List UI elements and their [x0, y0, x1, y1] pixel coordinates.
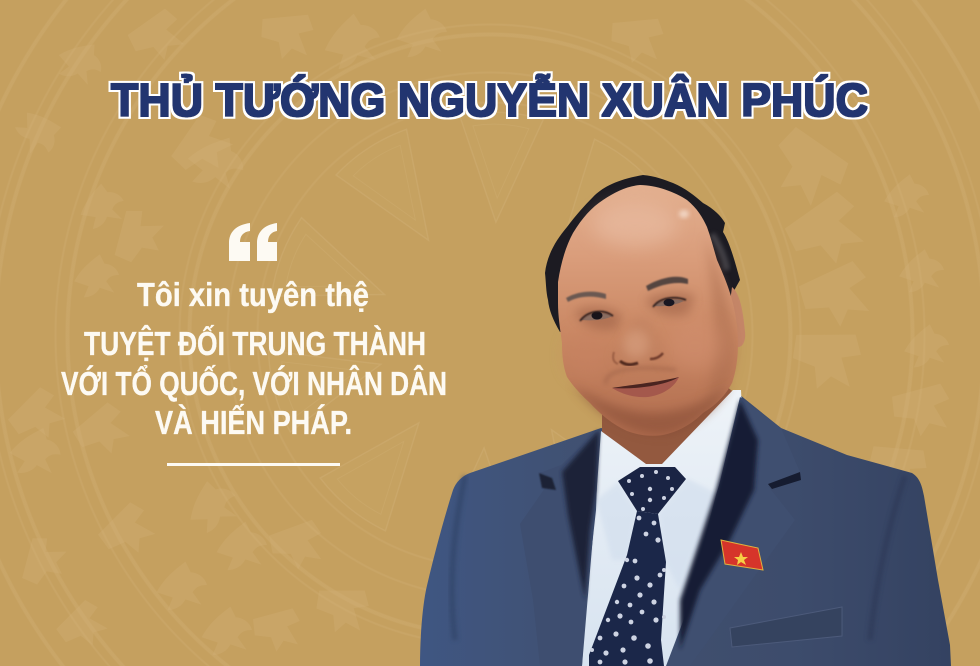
lower face shade: [572, 385, 730, 435]
cheek tint: [667, 319, 723, 371]
hair: [545, 175, 740, 332]
divider under quote: [167, 463, 340, 466]
quote text: [61, 276, 447, 441]
right sleeve seam: [870, 476, 905, 640]
shirt: [582, 390, 742, 666]
nose: [613, 316, 664, 367]
quote text: Tôi xin tuyên thệ: [137, 276, 369, 313]
drum triangle rays: [264, 110, 716, 560]
left eyebrow: [566, 292, 606, 302]
ear: [725, 287, 745, 347]
quote text: VÀ HIẾN PHÁP.: [155, 404, 352, 441]
quote text: TUYỆT ĐỐI TRUNG THÀNH: [84, 324, 426, 362]
left cheek tint: [568, 331, 608, 379]
smile mouth: [606, 368, 679, 397]
grey hair highlight: [712, 234, 727, 270]
portrait: prime minister: [420, 175, 951, 666]
right eye: [653, 298, 686, 307]
tie: [589, 467, 686, 666]
title: THỦ TƯỚNG NGUYỄN XUÂN PHÚC: [111, 74, 868, 126]
quote text: VỚI TỔ QUỐC, VỚI NHÂN DÂN: [61, 364, 447, 402]
forehead highlight: [593, 203, 677, 247]
forehead shine: [679, 210, 689, 218]
neck: [602, 385, 738, 466]
face: [558, 185, 738, 436]
right face shade: [700, 235, 736, 415]
collar shading: [596, 478, 716, 590]
jacket: [420, 395, 951, 666]
quotation mark icon: [229, 223, 277, 261]
eye socket shade: [574, 292, 695, 330]
pin: national assembly flag: [721, 540, 763, 570]
left lapel: [520, 430, 599, 666]
right lapel: [666, 397, 801, 666]
left eye: [580, 312, 613, 321]
left sleeve seam: [452, 476, 465, 640]
right eyebrow: [646, 277, 688, 291]
pocket: [730, 607, 842, 647]
